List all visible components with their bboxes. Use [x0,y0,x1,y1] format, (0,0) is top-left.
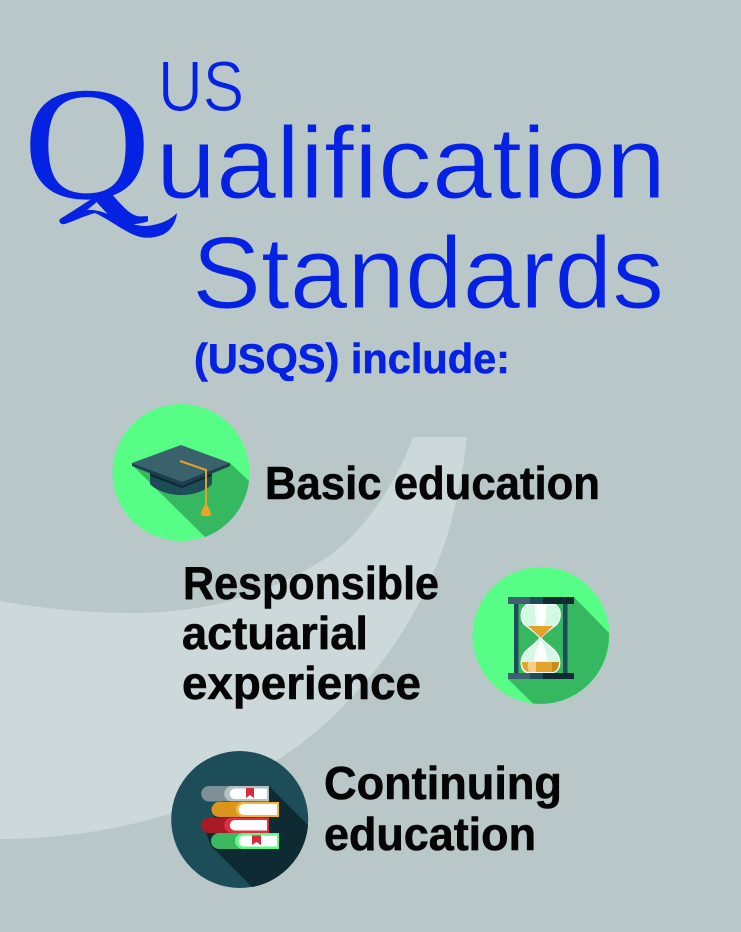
subtitle: (USQS) include: [194,335,510,382]
hourglass long shadow [508,597,609,704]
cap base [150,470,212,495]
title [23,48,666,382]
hourglass glass highlight [534,605,547,661]
book: grey [201,786,269,802]
cap board [132,445,230,482]
book: green [211,833,279,849]
label: responsible actuarial experience [182,557,439,709]
label: responsible actuarial experience: experience [182,657,421,709]
icon: hourglass [472,567,610,704]
label: responsible actuarial experience: actuarial [182,607,368,659]
label: continuing education [324,757,562,860]
label: basic education: Basic education [265,457,600,509]
hourglass sand [528,626,553,638]
title: large serif Q: Q [23,55,151,234]
cap board edge [132,463,230,486]
label: continuing education: Continuing [324,757,562,809]
icon: books [171,751,308,888]
icon: graduation cap [112,404,250,541]
book: orange [212,802,279,817]
title: ualification: ualification [156,106,666,220]
background swoosh [0,437,467,839]
hourglass top and bottom bars [508,597,574,679]
cap long shadow [132,463,249,537]
hourglass glass [521,604,560,673]
title: US: US [158,48,244,127]
label: responsible actuarial experience: Responsible [183,557,439,609]
book: red [201,818,269,833]
hourglass posts [514,602,518,674]
cap tassel [180,461,206,504]
title: decorative swash under Q [59,198,177,238]
books long shadow [205,786,308,887]
title: Standards: Standards [192,216,664,330]
label: continuing education: education [324,808,536,860]
